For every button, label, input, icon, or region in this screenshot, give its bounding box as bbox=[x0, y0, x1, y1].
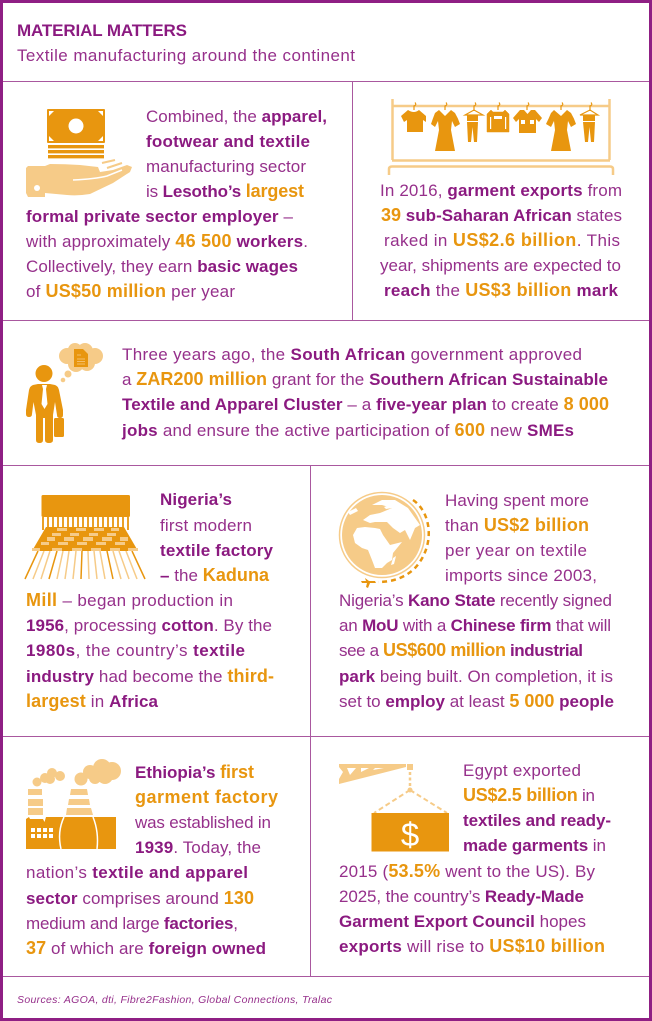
text: Nigeria Kaduna: textile factory bbox=[160, 541, 274, 560]
text: Egypt: 2015 (53.5% went to the US). By bbox=[339, 861, 596, 881]
text: Lesotho: footwear and textile bbox=[146, 132, 310, 151]
text: South Africa: a ZAR200 million grant for the Southern African Sustainable bbox=[122, 369, 608, 389]
text: garment exports: In 2016, garment exports from bbox=[380, 181, 622, 200]
panel: Egypt bbox=[339, 761, 611, 956]
text: garment exports: reach the US$3 billion mark bbox=[384, 280, 619, 300]
icon: crane lifting dollar sign: $ bbox=[401, 816, 419, 853]
panel: Nigeria Kano bbox=[339, 491, 614, 711]
sources footer: Sources: AGOA, dti, Fibre2Fashion, Global Connections, Tralac bbox=[17, 994, 333, 1006]
text: Ethiopia bbox=[26, 762, 278, 958]
text: South Africa: Three years ago, the South African government approved bbox=[122, 345, 582, 364]
text: Nigeria Kaduna: 1980s, the country’s textile bbox=[26, 641, 245, 660]
icon: globe with plane bbox=[340, 492, 429, 588]
text: Ethiopia: nation’s textile and apparel bbox=[26, 863, 248, 882]
text: South Africa: jobs and ensure the active participation of 600 new SMEs bbox=[121, 420, 574, 440]
icon: clothes rack bbox=[389, 99, 613, 175]
text: Nigeria Kano: Nigeria’s Kano State recently signed bbox=[339, 591, 612, 610]
text: Lesotho: manufacturing sector bbox=[146, 157, 306, 176]
text: garment exports bbox=[380, 181, 622, 300]
text: Lesotho bbox=[25, 107, 327, 301]
text: Lesotho: of US$50 million per year bbox=[26, 281, 235, 301]
panel: Lesotho bbox=[25, 107, 327, 301]
text: Ethiopia: 1939. Today, the bbox=[135, 838, 261, 857]
panel: Ethiopia bbox=[26, 759, 278, 958]
text: Nigeria Kano: an MoU with a Chinese firm that will bbox=[339, 616, 611, 635]
text: Ethiopia: was established in bbox=[134, 813, 271, 832]
text: Egypt: US$2.5 billion in bbox=[463, 785, 595, 805]
icon: crane lifting dollar sign bbox=[339, 764, 449, 853]
text: garment exports: year, shipments are expected to bbox=[380, 256, 621, 275]
text: Ethiopia: garment factory bbox=[135, 787, 278, 807]
text: Nigeria Kaduna: – the Kaduna bbox=[160, 565, 270, 585]
text: Nigeria Kaduna: largest in Africa bbox=[26, 691, 159, 711]
panel: garment exports bbox=[380, 99, 622, 300]
icon: money in hand bbox=[26, 109, 132, 197]
text: Lesotho: formal private sector employer – bbox=[26, 207, 294, 226]
text: Lesotho: Combined, the apparel, bbox=[146, 107, 327, 126]
text: garment exports: 39 sub-Saharan African states bbox=[381, 205, 622, 225]
text: South Africa: Textile and Apparel Cluster – a five-year plan to create 8 000 bbox=[122, 394, 609, 414]
text: Egypt: exports will rise to US$10 billion bbox=[339, 936, 605, 956]
panel: South Africa bbox=[26, 343, 609, 443]
text: Nigeria Kaduna: Nigeria’s bbox=[160, 490, 232, 509]
text: Egypt: Egypt exported bbox=[463, 761, 581, 780]
text: Egypt: made garments in bbox=[463, 836, 606, 855]
text: Lesotho: Collectively, they earn basic wages bbox=[26, 257, 298, 276]
text: South Africa bbox=[121, 345, 609, 440]
text: Nigeria Kano: see a US$600 million industrial bbox=[339, 640, 583, 660]
title: Textile manufacturing around the continent bbox=[17, 46, 355, 65]
panel: Nigeria Kaduna bbox=[25, 490, 274, 711]
text: Ethiopia: medium and large factories, bbox=[26, 914, 238, 933]
text: Nigeria Kano: imports since 2003, bbox=[445, 566, 597, 585]
title bbox=[17, 21, 355, 65]
text: Nigeria Kaduna: Mill – began production in bbox=[26, 590, 233, 610]
text: Ethiopia: Ethiopia’s first bbox=[135, 762, 254, 782]
icon: loom bbox=[25, 495, 145, 579]
text: Egypt bbox=[339, 761, 611, 956]
text: Ethiopia: sector comprises around 130 bbox=[26, 888, 254, 908]
icon: factory bbox=[26, 759, 121, 849]
text: Nigeria Kaduna: industry had become the third- bbox=[26, 666, 274, 686]
text: Egypt: Garment Export Council hopes bbox=[339, 912, 586, 931]
text: Ethiopia: 37 of which are foreign owned bbox=[26, 938, 266, 958]
text: Nigeria Kano: park being built. On completion, it is bbox=[339, 667, 613, 686]
text: Lesotho: with approximately 46 500 workers. bbox=[25, 231, 308, 251]
text: Lesotho: is Lesotho’s largest bbox=[146, 181, 304, 201]
text: Nigeria Kano bbox=[339, 491, 614, 711]
text: garment exports: raked in US$2.6 billion. This bbox=[384, 230, 620, 250]
text: Nigeria Kano: than US$2 billion bbox=[445, 515, 589, 535]
text: Nigeria Kano: set to employ at least 5 000 people bbox=[339, 691, 614, 711]
text: Egypt: textiles and ready- bbox=[463, 811, 611, 830]
text: Nigeria Kano: per year on textile bbox=[445, 541, 587, 560]
text: Nigeria Kaduna: first modern bbox=[160, 516, 252, 535]
text: Nigeria Kaduna: 1956, processing cotton. By the bbox=[26, 616, 272, 635]
title: MATERIAL MATTERS bbox=[17, 21, 187, 40]
icon: businessman with thought bubble bbox=[26, 343, 103, 443]
text: Nigeria Kaduna bbox=[26, 490, 274, 711]
text: Egypt: 2025, the country’s Ready-Made bbox=[339, 887, 584, 906]
text: Nigeria Kano: Having spent more bbox=[445, 491, 589, 510]
